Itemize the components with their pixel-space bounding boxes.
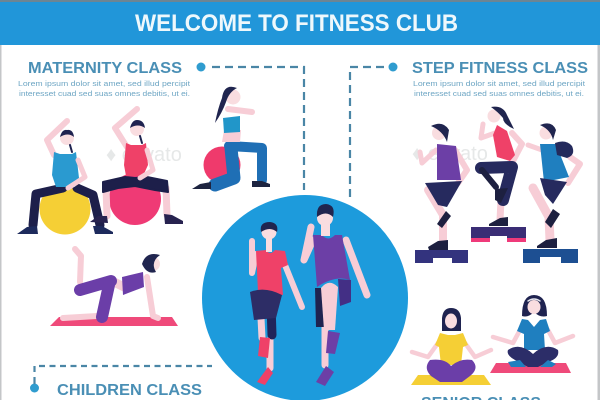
- figure: woman on pink mat: [50, 249, 178, 326]
- panel: step fitness class heading: [412, 60, 588, 98]
- watermark left: ♦ envato: [106, 144, 182, 166]
- figure: woman runner: [250, 222, 302, 385]
- panel: children class heading: CHILDREN CLASS: [57, 382, 202, 399]
- figure: step woman pink: [471, 107, 526, 242]
- figure: man runner: [304, 204, 367, 386]
- title: WELCOME TO FITNESS CLUB: [135, 10, 458, 37]
- panel: maternity class heading: [18, 60, 190, 98]
- panel: maternity class heading: interesset cuad sed suas omnes debitis, ut ei.: [19, 89, 190, 98]
- header banner: [0, 0, 600, 45]
- figure: senior woman yellow on yoga mat: [411, 308, 491, 385]
- panel: step fitness class heading: interesset cuad sed suas omnes debitis, ut ei.: [414, 89, 584, 98]
- panel: step fitness class heading: Lorem ipsum dolor sit amet, sed illud percipit: [413, 79, 585, 88]
- figure: lunging woman on ball: [192, 87, 270, 189]
- connector: children: [30, 366, 212, 392]
- panel: maternity class heading: MATERNITY CLASS: [28, 60, 182, 77]
- connector: maternity: [196, 62, 304, 190]
- figure: maternity woman on pink ball: [90, 109, 183, 225]
- figure: maternity woman on yellow ball: [17, 121, 113, 234]
- figure: step man blue with backpack: [523, 123, 580, 263]
- figure: step man purple: [415, 124, 468, 263]
- panel: maternity class heading: Lorem ipsum dolor sit amet, sed illud percipit: [18, 79, 190, 88]
- figure: senior woman blue on pink mat: [490, 295, 573, 373]
- panel: step fitness class heading: STEP FITNESS CLASS: [412, 60, 588, 77]
- connector: step fitness: [350, 62, 398, 200]
- central blue circle: [202, 195, 408, 400]
- watermark right: ♦ envato: [412, 143, 488, 165]
